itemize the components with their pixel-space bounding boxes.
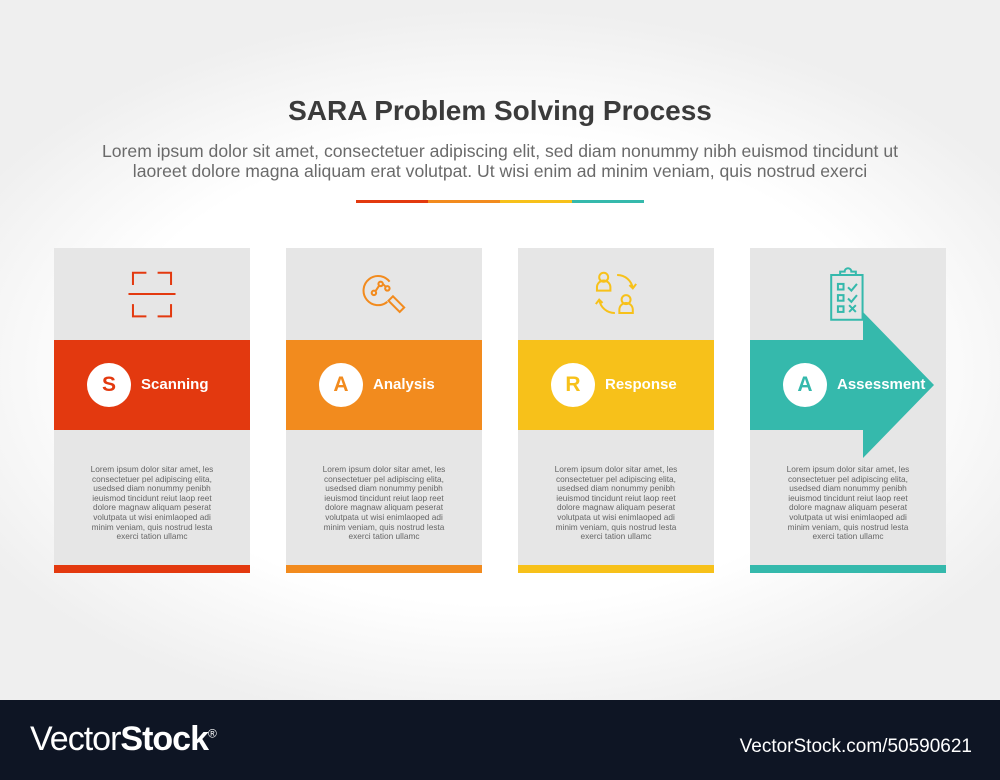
text: ieuismod tincidunt reiut laop reet: [788, 493, 908, 503]
icon: clipboard: [830, 267, 864, 321]
text: minim veniam, quis nostrud lesta: [324, 522, 444, 532]
text: [323, 464, 445, 541]
card: scanning: [54, 248, 250, 573]
text: minim veniam, quis nostrud lesta: [788, 522, 908, 532]
text: Lorem ipsum dolor sitar amet, les: [91, 464, 213, 474]
text: minim veniam, quis nostrud lesta: [556, 522, 676, 532]
icon: magnifier: [362, 275, 406, 314]
divider: [356, 200, 644, 203]
text: volutpata ut wisi enimlaoped adi: [557, 512, 675, 522]
arrow band: [750, 312, 934, 458]
text: Lorem ipsum dolor sitar amet, les: [323, 464, 445, 474]
card: response: [518, 248, 714, 573]
text: ieuismod tincidunt reiut laop reet: [92, 493, 212, 503]
text: consectetuer pel adipiscing elita,: [92, 474, 212, 484]
text: usedsed diam nonummy penibh: [93, 483, 211, 493]
card: response: Response: [605, 376, 677, 393]
text: volutpata ut wisi enimlaoped adi: [325, 512, 443, 522]
text: [787, 464, 909, 541]
band: [54, 340, 250, 430]
band: S: [102, 373, 116, 396]
text: usedsed diam nonummy penibh: [325, 483, 443, 493]
card: analysis: A: [333, 373, 349, 396]
footer: [0, 700, 1000, 780]
text: minim veniam, quis nostrud lesta: [92, 522, 212, 532]
text: [91, 464, 213, 541]
text: exerci tation ullamc: [812, 531, 884, 541]
text: exerci tation ullamc: [116, 531, 188, 541]
text: volutpata ut wisi enimlaoped adi: [93, 512, 211, 522]
card: response: R: [565, 373, 581, 396]
card: analysis: [286, 248, 482, 573]
text: Lorem ipsum dolor sitar amet, les: [555, 464, 677, 474]
icon: scan: [128, 272, 176, 318]
card: assessment: [750, 248, 946, 573]
text: consectetuer pel adipiscing elita,: [556, 474, 676, 484]
text: ieuismod tincidunt reiut laop reet: [556, 493, 676, 503]
text: Lorem ipsum dolor sitar amet, les: [787, 464, 909, 474]
logo: VectorStock®: [30, 720, 216, 758]
subtitle: [102, 141, 898, 181]
text: dolore magnaw aliquam peserat: [789, 502, 907, 512]
text: dolore magnaw aliquam peserat: [93, 502, 211, 512]
text: consectetuer pel adipiscing elita,: [788, 474, 908, 484]
text: exerci tation ullamc: [580, 531, 652, 541]
text: usedsed diam nonummy penibh: [557, 483, 675, 493]
subtitle: Lorem ipsum dolor sit amet, consectetuer adipiscing elit, sed diam nonummy nibh euismod tincidunt ut: [102, 141, 898, 161]
text: consectetuer pel adipiscing elita,: [324, 474, 444, 484]
id: VectorStock.com/50590621: [740, 736, 972, 757]
text: volutpata ut wisi enimlaoped adi: [789, 512, 907, 522]
card: analysis: Analysis: [373, 376, 435, 393]
card: assessment: Assessment: [837, 376, 925, 393]
text: exerci tation ullamc: [348, 531, 420, 541]
text: [555, 464, 677, 541]
band: Scanning: [141, 376, 209, 393]
text: ieuismod tincidunt reiut laop reet: [324, 493, 444, 503]
icon: people cycle: [595, 272, 637, 314]
title: SARA Problem Solving Process: [288, 95, 712, 126]
text: dolore magnaw aliquam peserat: [557, 502, 675, 512]
subtitle: laoreet dolore magna aliquam erat volutpat. Ut wisi enim ad minim veniam, quis nostrud exerci: [133, 161, 867, 181]
text: usedsed diam nonummy penibh: [789, 483, 907, 493]
card: assessment: A: [797, 373, 813, 396]
text: dolore magnaw aliquam peserat: [325, 502, 443, 512]
